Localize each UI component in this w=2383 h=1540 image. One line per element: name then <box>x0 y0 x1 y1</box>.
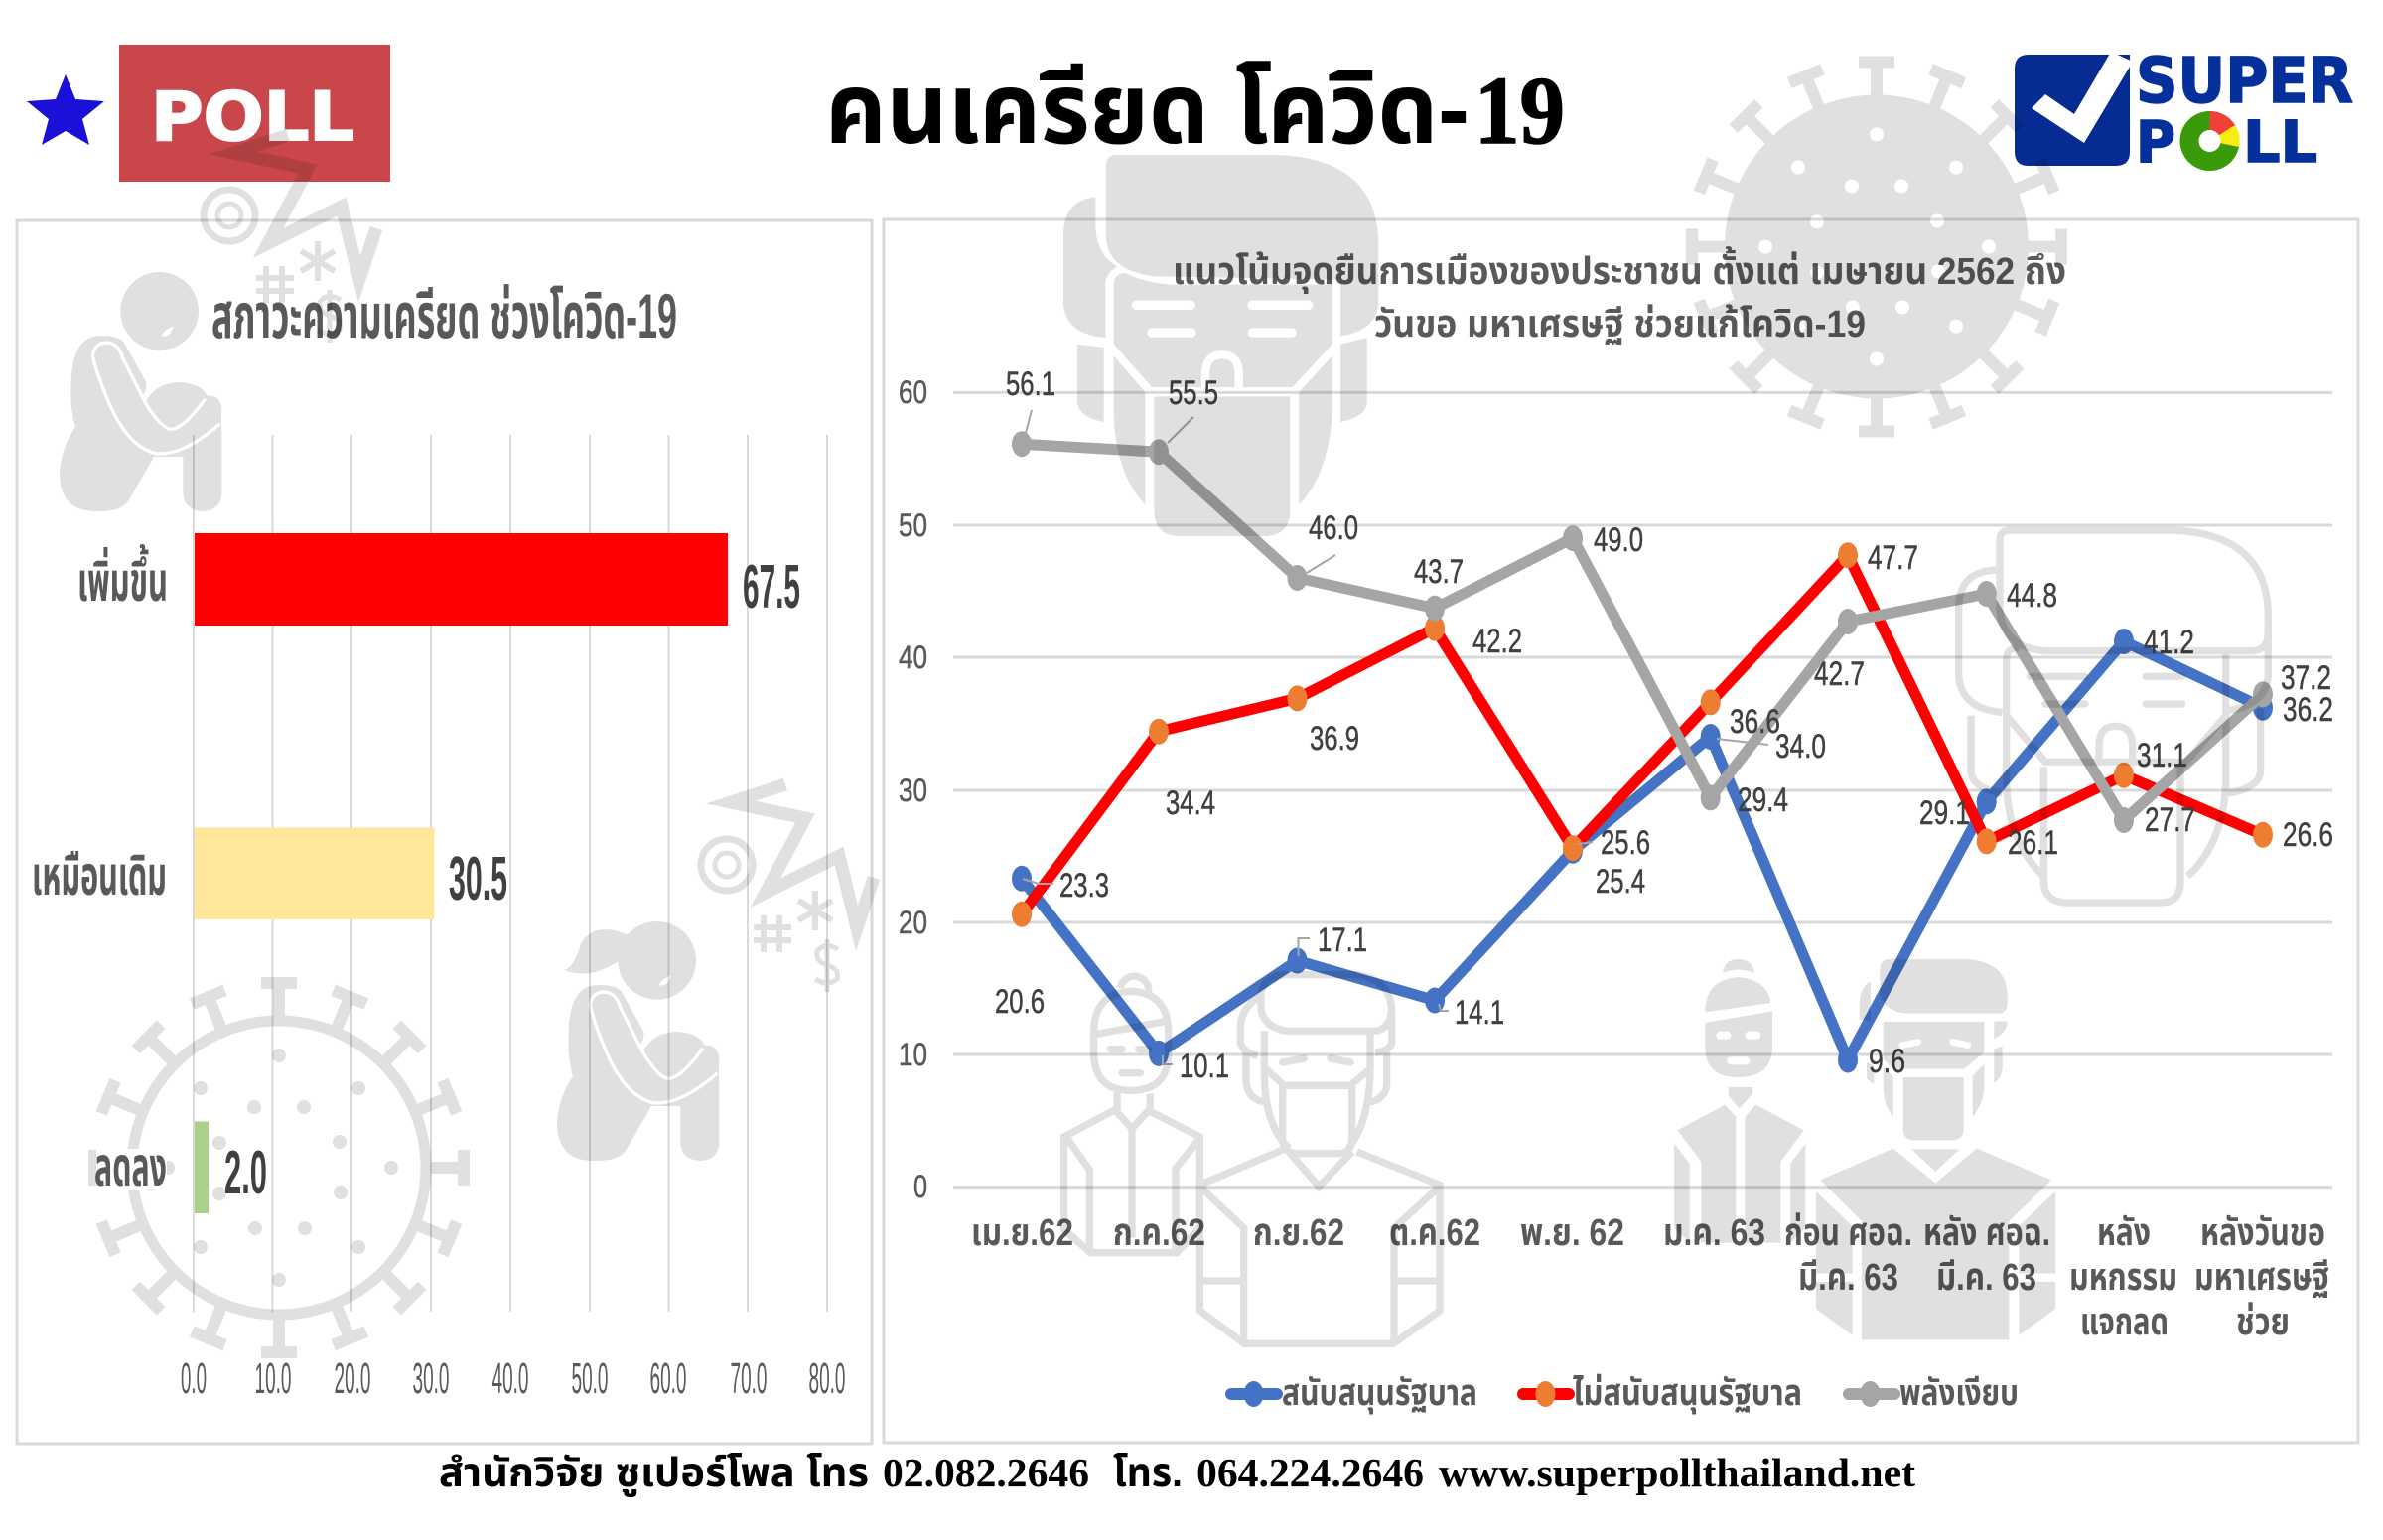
y axis labels: 50 <box>899 507 927 543</box>
watermark icons overlay <box>60 62 2268 1352</box>
data labels: 34.4 <box>1166 784 1215 822</box>
chart: stress bar chart <box>32 282 846 1403</box>
data labels: 36.9 <box>1310 720 1359 758</box>
axis labels: stress chart: 20.0 <box>334 1354 371 1403</box>
panel: trend chart frame <box>884 219 2358 1443</box>
data labels: 46.0 <box>1309 509 1358 547</box>
axis labels: stress chart: 60.0 <box>649 1354 687 1403</box>
data labels: 37.2 <box>2281 659 2331 697</box>
badge: POLL <box>119 45 390 182</box>
icon: masked head filled <box>1063 155 1378 536</box>
y axis labels: 10 <box>899 1037 927 1072</box>
logo: SUPER POLL <box>2015 45 2353 176</box>
axis labels: stress chart: 30.0 <box>413 1354 449 1403</box>
data labels: 41.2 <box>2144 624 2194 661</box>
data labels: 29.1 <box>1919 794 1970 832</box>
icon: masked head outline <box>1959 530 2268 903</box>
chart: stress bar chart: 67.5 <box>743 553 800 622</box>
icon: masked man outline <box>1199 975 1440 1343</box>
heading: trend chart: แนวโน้มจุดยืนการเมืองของประชาชน ตั้งแต่ เมษายน 2562 ถึง <box>1173 245 2066 294</box>
category labels: หลังวันขอ <box>2200 1212 2325 1254</box>
heading: trend chart: วันขอ มหาเศรษฐี ช่วยแก้โควิด-19 <box>1374 304 1866 346</box>
footer: contact line <box>439 1450 1915 1497</box>
bar: increased 67.5 <box>77 533 800 626</box>
legend: support <box>1231 1372 1477 1414</box>
category labels: ก่อน ศอฉ. <box>1784 1212 1912 1254</box>
y axis labels <box>899 374 927 1204</box>
data labels: 17.1 <box>1318 921 1367 959</box>
icon: virus filled <box>1692 62 2061 431</box>
data labels: 27.7 <box>2145 801 2195 839</box>
category labels: มหาเศรษฐี <box>2194 1257 2329 1299</box>
data labels: 42.2 <box>1472 623 1522 660</box>
panel: stress chart frame <box>17 220 872 1444</box>
bar: increased 67.5: เพิ่มขึ้น <box>77 543 168 613</box>
bar: decreased 2.0 <box>195 1122 267 1213</box>
logo: SUPER POLL: SUPER <box>2136 45 2353 117</box>
data labels: 44.8 <box>2007 577 2057 615</box>
axis labels: stress chart <box>181 1354 846 1403</box>
category labels: พ.ย. 62 <box>1520 1212 1624 1254</box>
icon: woman filled <box>1674 959 1805 1243</box>
data labels: 26.1 <box>2008 824 2058 862</box>
category labels: แจกลด <box>2080 1302 2169 1343</box>
legend: silent: พลังเงียบ <box>1899 1372 2019 1413</box>
data labels: 36.2 <box>2283 691 2333 729</box>
category labels: มี.ค. 63 <box>1936 1257 2036 1299</box>
y axis labels: 30 <box>899 772 927 808</box>
chart: political stance line chart <box>899 245 2333 1414</box>
logo: SUPER POLL: P <box>2136 108 2175 176</box>
data labels: 14.1 <box>1455 994 1504 1032</box>
data labels: 26.6 <box>2283 816 2333 854</box>
icon: blue star <box>27 74 104 145</box>
axis labels: stress chart: 50.0 <box>572 1354 608 1403</box>
y axis labels: 20 <box>899 905 927 940</box>
series: oppose government (red) <box>1012 542 2273 927</box>
category labels: เม.ย.62 <box>971 1212 1073 1254</box>
data labels: 43.7 <box>1414 553 1464 591</box>
y axis labels: 40 <box>899 639 927 675</box>
axis labels: stress chart: 40.0 <box>492 1354 528 1403</box>
data labels <box>995 365 2333 1085</box>
data labels: 49.0 <box>1594 521 1643 559</box>
legend <box>1231 1372 2019 1414</box>
series: support government (blue) <box>1012 629 2273 1072</box>
text: 80.0 <box>808 1354 846 1403</box>
category labels: ม.ค. 63 <box>1663 1212 1765 1254</box>
data labels: 25.4 <box>1596 863 1645 901</box>
chart: stress bar chart: 30.5 <box>449 845 507 913</box>
footer: contact line: โทร. <box>1113 1450 1183 1495</box>
axis labels: stress chart: 70.0 <box>731 1354 767 1403</box>
category labels: หลัง <box>2097 1212 2151 1254</box>
data labels: 25.6 <box>1601 824 1650 862</box>
chart: stress bar chart: 2.0 <box>224 1139 267 1207</box>
axis labels: stress chart: 0.0 <box>181 1354 207 1403</box>
category labels: ก.ค.62 <box>1113 1212 1205 1254</box>
category labels: ช่วย <box>2236 1302 2290 1343</box>
icon: masked man filled <box>1816 959 2055 1339</box>
data labels: 34.0 <box>1775 728 1826 766</box>
icon: virus outline <box>94 983 464 1352</box>
icon: stressed man with lightning <box>60 135 376 511</box>
category labels: หลัง ศอฉ. <box>1923 1212 2050 1254</box>
axis labels: stress chart: 10.0 <box>254 1354 292 1403</box>
data labels: 42.7 <box>1814 655 1865 693</box>
category labels: มหกรรม <box>2069 1257 2177 1299</box>
heading: stress chart: สภาวะความเครียด ช่วงโควิด-19 <box>211 282 677 351</box>
data labels: 10.1 <box>1180 1048 1229 1085</box>
bar: same 30.5 <box>32 828 507 919</box>
title: 19 <box>1474 58 1565 165</box>
data labels: 29.4 <box>1738 781 1788 819</box>
bar: same 30.5: เหมือนเดิม <box>32 845 167 907</box>
legend: support: สนับสนุนรัฐบาล <box>1282 1372 1477 1414</box>
data labels: 9.6 <box>1869 1043 1905 1080</box>
data labels: 23.3 <box>1059 867 1109 905</box>
data labels: 55.5 <box>1169 374 1218 412</box>
footer: contact line: 064.224.2646 <box>1196 1450 1424 1495</box>
title: คนเครียด โควิด- <box>825 54 1470 165</box>
legend: oppose: ไม่สนับสนุนรัฐบาล <box>1573 1372 1802 1414</box>
bar label: decreased: ลดลง <box>94 1136 167 1197</box>
category labels: ต.ค.62 <box>1389 1212 1480 1254</box>
category labels <box>971 1212 2329 1343</box>
heading: trend chart <box>1173 245 2066 346</box>
data labels: 36.6 <box>1730 703 1780 741</box>
footer: contact line: 02.082.2646 <box>883 1450 1089 1495</box>
icon: woman outline <box>1064 976 1199 1253</box>
footer: contact line: สำนักวิจัย ซูเปอร์โพล โทร <box>439 1450 869 1497</box>
y axis labels: 0 <box>913 1169 927 1204</box>
y axis labels: 60 <box>899 374 927 410</box>
logo: SUPER POLL: LL <box>2243 108 2317 176</box>
icon: stressed woman with lightning <box>557 784 874 1161</box>
data labels: 31.1 <box>2137 737 2187 774</box>
footer: contact line: www.superpollthailand.net <box>1439 1450 1915 1495</box>
bar label: decreased <box>94 1136 167 1197</box>
data labels: 20.6 <box>995 983 1045 1021</box>
data labels: 56.1 <box>1006 365 1055 403</box>
category labels: มี.ค. 63 <box>1798 1257 1898 1299</box>
badge: POLL: POLL <box>151 78 354 157</box>
series: silent power (gray) <box>1012 431 2273 833</box>
data labels: 47.7 <box>1868 539 1918 577</box>
legend: silent <box>1849 1372 2019 1413</box>
category labels: ก.ย.62 <box>1253 1212 1344 1254</box>
leader lines <box>1023 410 1768 1064</box>
